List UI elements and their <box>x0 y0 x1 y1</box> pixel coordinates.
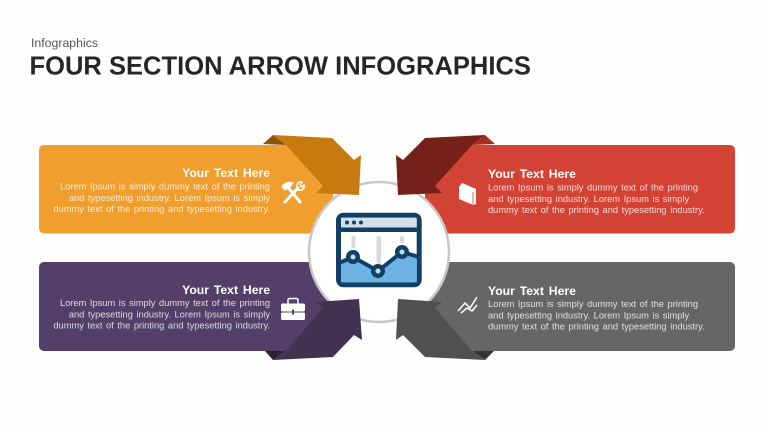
body text: and typesetting industry. Lorem Ipsum is simply <box>69 193 270 203</box>
heading: Your Text Here <box>182 166 270 180</box>
icon: browser analytics window <box>338 215 419 285</box>
body text: and typesetting industry. Lorem Ipsum is simply <box>488 310 689 320</box>
body text: and typesetting industry. Lorem Ipsum is simply <box>488 194 689 204</box>
body text: dummy text of the printing and typesetting industry. <box>53 204 270 214</box>
panel: top left orange <box>39 145 333 234</box>
panel: bottom right grey <box>425 262 735 351</box>
panel: top right red <box>425 145 735 234</box>
icon: book <box>459 183 476 205</box>
body text <box>53 182 270 214</box>
icon: tools <box>282 182 304 202</box>
blue area chart <box>341 252 417 282</box>
icon: line chart <box>458 297 477 313</box>
body text <box>53 298 270 330</box>
heading: Your Text Here <box>488 167 576 181</box>
body text: dummy text of the printing and typesetting industry. <box>53 320 270 330</box>
icon: briefcase <box>281 298 305 320</box>
heading: Your Text Here <box>182 283 270 297</box>
arrow: top right <box>396 135 495 195</box>
body text: Lorem Ipsum is simply dummy text of the printing <box>60 182 270 192</box>
body text: and typesetting industry. Lorem Ipsum is simply <box>69 310 270 320</box>
arrow: top left <box>263 135 361 195</box>
body text: Lorem Ipsum is simply dummy text of the printing <box>488 299 698 309</box>
center circle <box>309 182 449 322</box>
title: FOUR SECTION ARROW INFOGRAPHICS <box>30 52 531 80</box>
body text <box>488 299 705 332</box>
body text: Lorem Ipsum is simply dummy text of the printing <box>60 298 270 308</box>
line with markers <box>339 245 419 278</box>
arrow: bottom left <box>265 299 362 360</box>
body text: dummy text of the printing and typesetting industry. <box>488 322 705 332</box>
heading: Your Text Here <box>488 284 576 298</box>
subtitle: Infographics <box>31 36 98 50</box>
panel: bottom left purple <box>39 262 333 351</box>
body text <box>488 182 705 215</box>
arrow: bottom right <box>396 299 494 360</box>
body text: Lorem Ipsum is simply dummy text of the printing <box>488 182 698 192</box>
browser header <box>341 218 417 228</box>
grey bars <box>352 236 404 264</box>
body text: dummy text of the printing and typesetting industry. <box>488 205 705 215</box>
